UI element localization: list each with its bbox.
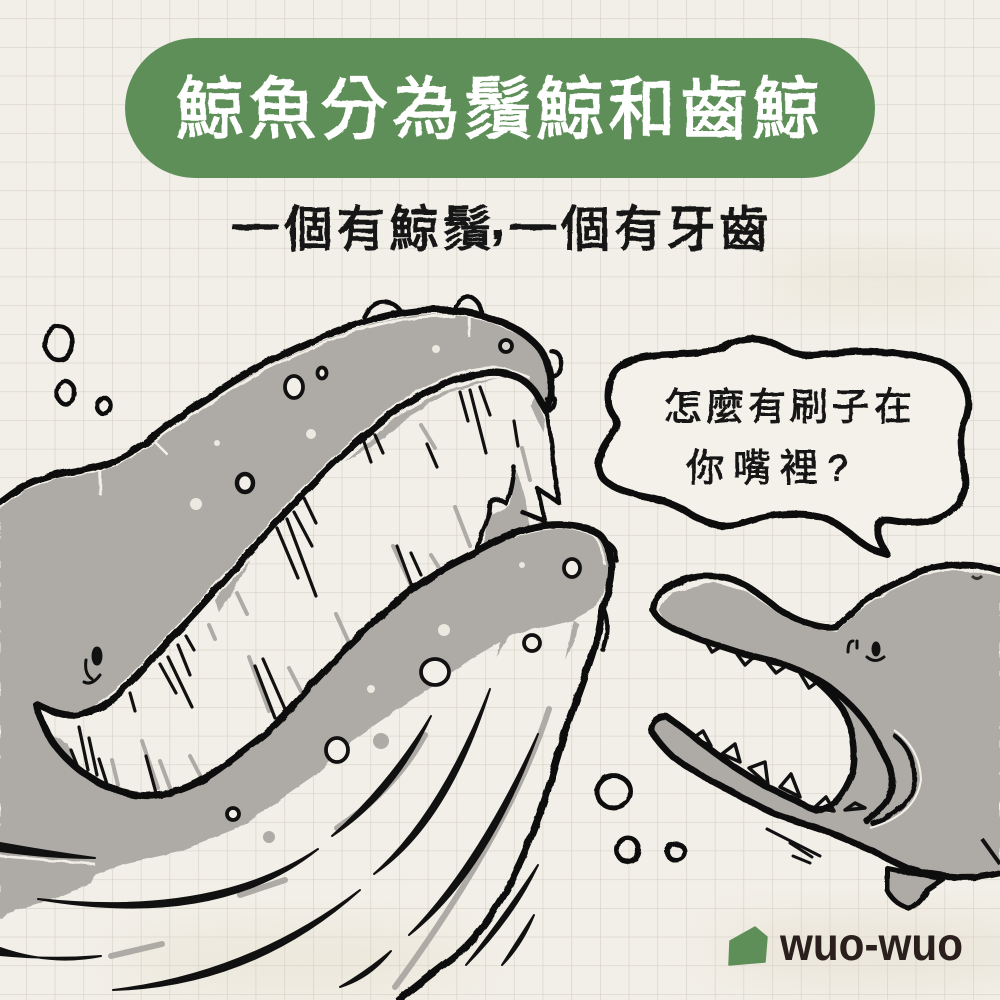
gray spots: [263, 733, 389, 843]
tail fin: [887, 868, 943, 909]
toothed whale outlines: [651, 565, 1000, 877]
toothed whale eyes: [848, 641, 884, 660]
toothed whale: [651, 565, 1000, 909]
belly black lines: [0, 689, 538, 990]
blowhole: [972, 576, 982, 578]
cheek highlight: [870, 730, 921, 828]
baleen front fringe: [484, 470, 530, 545]
logo: [729, 918, 963, 970]
speech text: 你嘴裡?: [686, 448, 857, 490]
lower jaw outline: [36, 525, 612, 1000]
cheek crescent: [873, 736, 915, 824]
upper jaw outline: [0, 310, 551, 715]
whale eye: [84, 648, 101, 683]
light rim lines: [0, 316, 605, 864]
title banner: [125, 38, 875, 178]
baleen edge: [474, 412, 559, 555]
upper teeth: [706, 642, 843, 697]
subtitle: 一個有鯨鬚: [231, 203, 495, 257]
mouth shadows: [48, 378, 580, 775]
barnacle rings: [227, 340, 580, 820]
head bumps: [364, 297, 616, 650]
upper outline: [653, 565, 1000, 628]
subtitle: ,: [491, 195, 508, 249]
inner mouth and lower jaw: [651, 674, 1000, 877]
air bubbles left: [45, 326, 111, 414]
baleen gray strokes: [66, 425, 530, 788]
whale outlines: [0, 297, 616, 1000]
baleen black strokes: [71, 387, 518, 793]
whale body gray fill: [0, 315, 610, 919]
logo house icon: [729, 927, 767, 965]
title text: 鯨魚分為鬚鯨和齒鯨: [176, 72, 824, 148]
snout and throat line: [653, 610, 893, 821]
baleen whale: [0, 297, 616, 1000]
air bubbles right: [597, 776, 685, 862]
logo wordmark: wuo-wuo: [779, 918, 963, 970]
lower teeth: [693, 731, 865, 811]
pale spots: [190, 345, 525, 693]
toothed whale gray fill: [652, 570, 1000, 877]
belly gray stripes: [0, 709, 549, 987]
speech text: 怎麼有刷子在: [664, 387, 916, 429]
flipper line: [982, 839, 1000, 864]
subtitle: 一個有牙齒: [508, 203, 772, 257]
speech bubble: [598, 339, 969, 554]
motion lines: [767, 829, 820, 863]
